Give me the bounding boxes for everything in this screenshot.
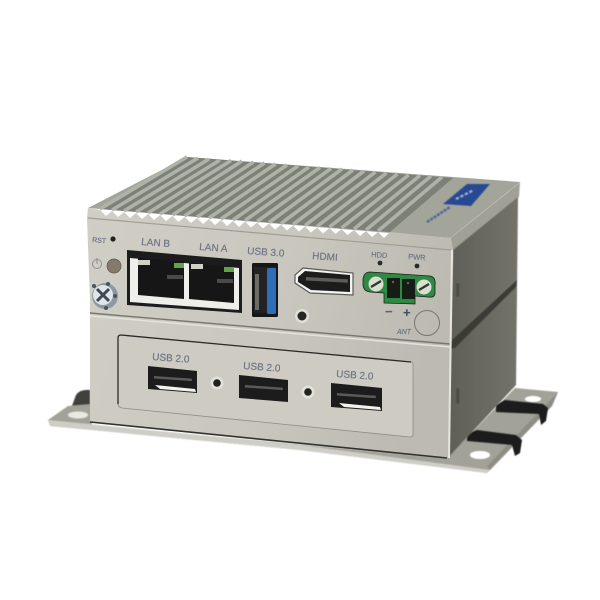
power icon and button: [92, 258, 121, 273]
antenna label and knockout: ANT: [396, 329, 412, 336]
reset label and button: RST: [92, 237, 107, 245]
label on top: [427, 184, 490, 222]
rubber strips on flange: [467, 400, 548, 456]
USB 2.0 panel: [118, 335, 413, 437]
USB 3.0 port: [252, 263, 278, 317]
panel holes: [210, 376, 314, 398]
LAN A jack: [189, 263, 234, 303]
antenna label and knockout: [396, 310, 440, 336]
USB 2.0 port middle: [239, 361, 288, 402]
ground screw: [92, 282, 118, 310]
HDD and PWR indicators: HDD: [371, 250, 388, 260]
reset label and button: [92, 236, 116, 245]
LAN port labels: LAN A: [199, 242, 228, 255]
LAN B jack: [138, 258, 184, 299]
USB 2.0 port middle: USB 2.0: [243, 361, 281, 375]
USB 3.0 label: USB 3.0: [247, 246, 285, 260]
USB 2.0 port right: USB 2.0: [336, 369, 374, 383]
USB 2.0 port left: USB 2.0: [152, 352, 190, 366]
green power connector: [363, 272, 435, 304]
HDD and PWR indicators: PWR: [408, 252, 427, 262]
polarity marks: −: [385, 304, 393, 319]
mounting hole: [295, 309, 309, 323]
polarity marks: [385, 304, 411, 320]
LAN port labels: LAN B: [141, 237, 171, 250]
USB 2.0 port left: [148, 352, 197, 393]
HDMI port: [295, 268, 353, 295]
mounting flange: [48, 388, 558, 473]
right side of case: [448, 182, 520, 458]
USB 2.0 port right: [331, 369, 382, 411]
LAN port labels: [141, 237, 228, 255]
top of case with heat-sink ribs: [88, 157, 520, 238]
HDD and PWR indicators: [371, 250, 427, 268]
HDMI label: HDMI: [312, 251, 338, 264]
dual LAN ports: [127, 250, 242, 313]
front of case: [87, 208, 453, 458]
polarity marks: +: [403, 305, 411, 320]
